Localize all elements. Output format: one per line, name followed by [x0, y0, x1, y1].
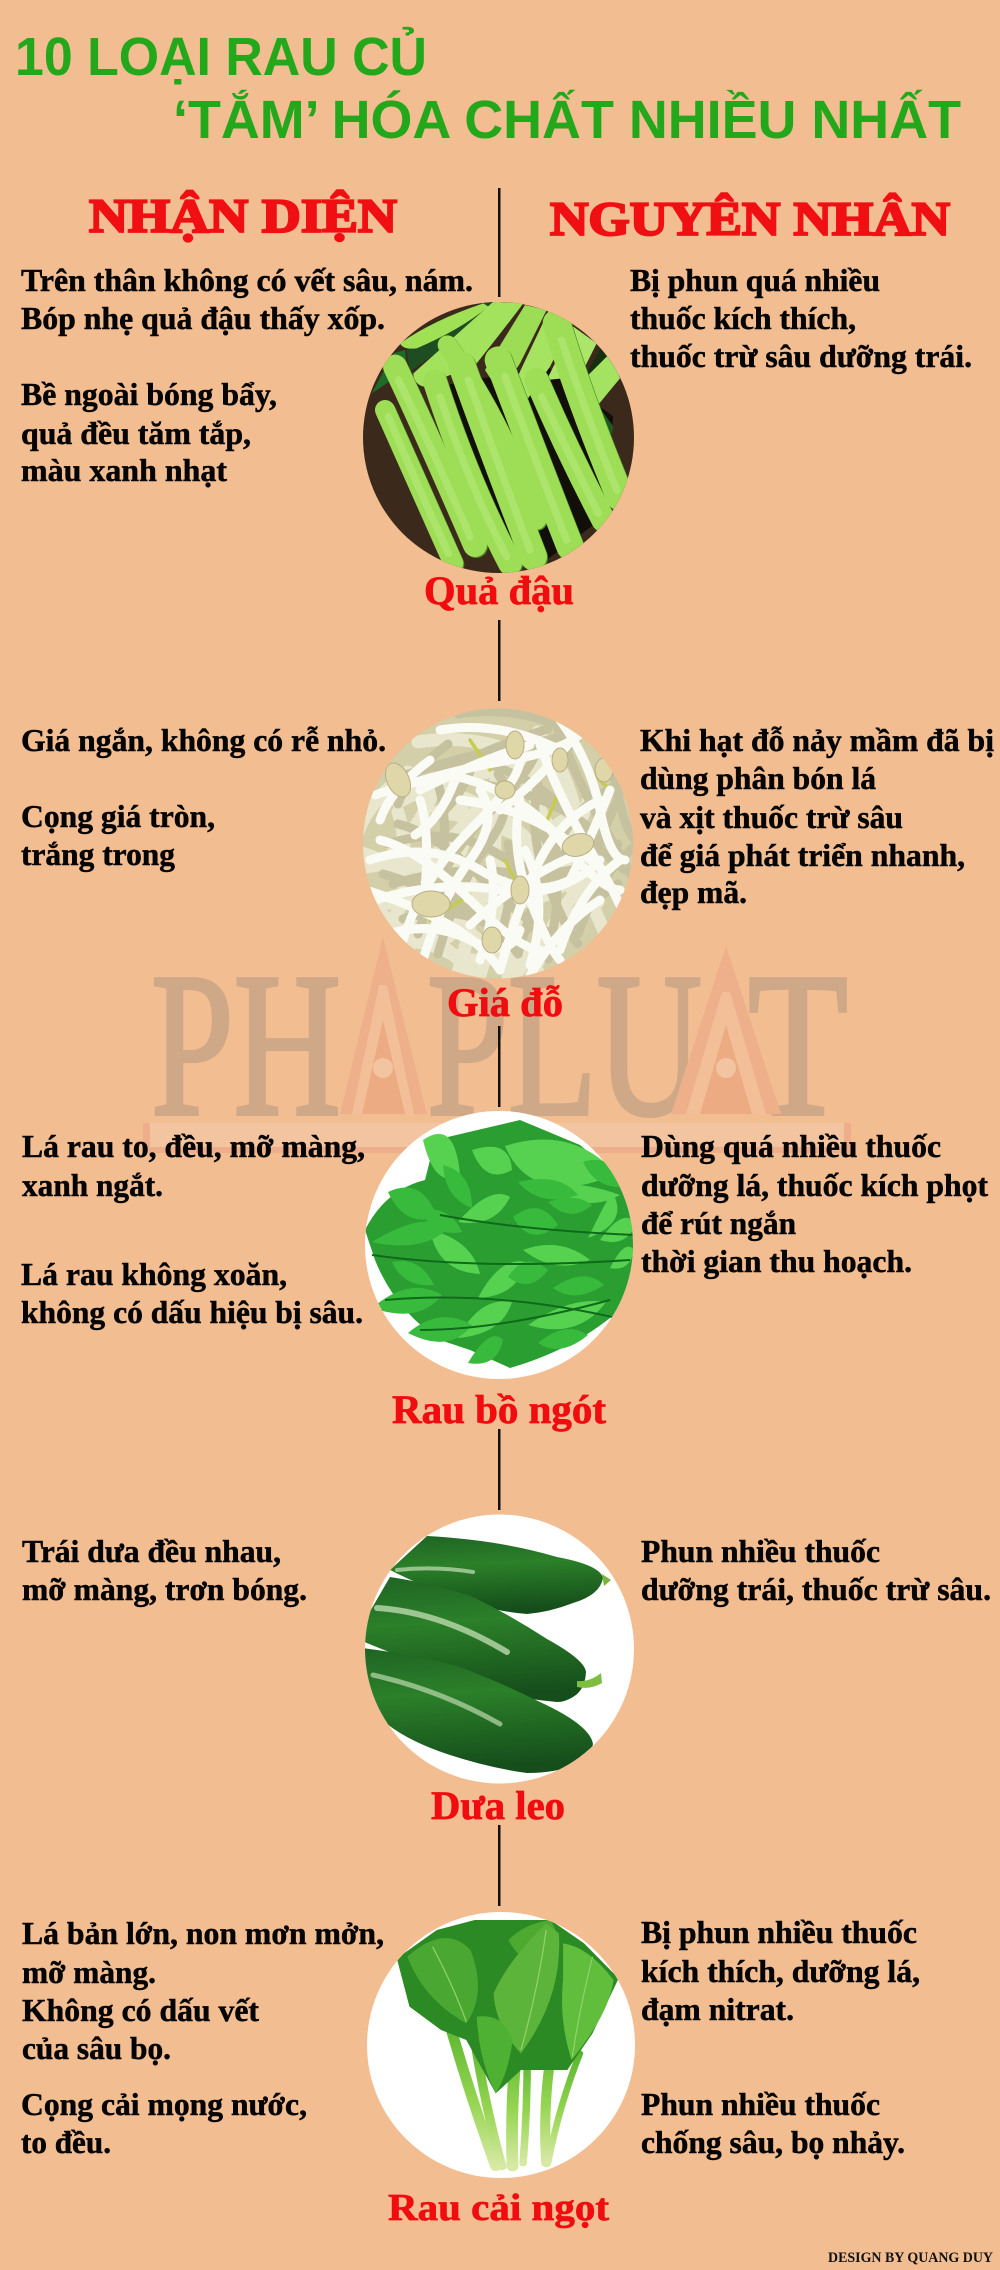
- identification text: Rau cải ngọt: [21, 1916, 384, 2160]
- cause text: Rau bồ ngót: Dùng quá nhiều thuốc: [641, 1129, 941, 1164]
- panel: Giá đỗ: [21, 704, 994, 1025]
- cause text: Giá đỗ: [640, 723, 994, 910]
- identification text: Dưa leo: mỡ màng, trơn bóng.: [22, 1572, 307, 1607]
- watermark: Pháp Luật logo: PLU: [427, 930, 702, 1159]
- identification text: Rau cải ngọt: Cọng cải mọng nước,: [21, 2087, 307, 2122]
- identification text: Quả đậu: màu xanh nhạt: [21, 453, 228, 488]
- cause text: Giá đỗ: và xịt thuốc trừ sâu: [640, 800, 903, 835]
- cause text: Dưa leo: [641, 1534, 991, 1607]
- panel: Dưa leo: [22, 1510, 991, 1828]
- cause text: Quả đậu: Bị phun quá nhiều: [630, 263, 880, 298]
- photo: choy sum greens: [360, 1905, 640, 2185]
- label: Quả đậu: Quả đậu: [424, 568, 574, 613]
- cause text: Rau cải ngọt: chống sâu, bọ nhảy.: [641, 2125, 905, 2160]
- cause text: Giá đỗ: dùng phân bón lá: [640, 761, 876, 796]
- vertical connector lines: [498, 188, 500, 1906]
- cause text: Giá đỗ: Khi hạt đỗ nảy mầm đã bị: [640, 723, 994, 758]
- identification text: Rau bồ ngót: Lá rau không xoăn,: [21, 1257, 287, 1292]
- identification text: Rau bồ ngót: Lá rau to, đều, mỡ màng,: [22, 1129, 365, 1164]
- cause text: Giá đỗ: đẹp mã.: [640, 875, 747, 910]
- cause text: Rau bồ ngót: dưỡng lá, thuốc kích phọt: [641, 1168, 989, 1203]
- identification text: Quả đậu: Trên thân không có vết sâu, nám.: [21, 263, 473, 298]
- identification text: Dưa leo: [22, 1534, 307, 1607]
- cause text: Rau cải ngọt: kích thích, dưỡng lá,: [641, 1954, 920, 1989]
- identification text: Rau cải ngọt: của sâu bọ.: [22, 2031, 171, 2066]
- cause text: Rau cải ngọt: đạm nitrat.: [641, 1992, 794, 2027]
- label: Dưa leo: Dưa leo: [431, 1783, 565, 1828]
- label: Rau bồ ngót: Rau bồ ngót: [392, 1387, 607, 1432]
- panel: Rau bồ ngót: [21, 1105, 989, 1432]
- cause text: Dưa leo: dưỡng trái, thuốc trừ sâu.: [641, 1572, 991, 1607]
- label: Giá đỗ: Giá đỗ: [447, 980, 563, 1025]
- identification text: Rau cải ngọt: mỡ màng.: [22, 1955, 156, 1990]
- identification text: Quả đậu: [21, 263, 473, 488]
- cause text: Quả đậu: thuốc kích thích,: [630, 301, 856, 336]
- cause text: Rau bồ ngót: thời gian thu hoạch.: [641, 1244, 912, 1279]
- cause text: Quả đậu: thuốc trừ sâu dưỡng trái.: [630, 339, 972, 374]
- cause text: Giá đỗ: để giá phát triển nhanh,: [640, 838, 965, 873]
- identification text: Quả đậu: quả đều tăm tắp,: [21, 416, 251, 451]
- identification text: Giá đỗ: Giá ngắn, không có rễ nhỏ.: [21, 723, 386, 758]
- cause text: Dưa leo: Phun nhiều thuốc: [641, 1534, 880, 1569]
- identification text: Giá đỗ: [21, 723, 386, 872]
- watermark: Pháp Luật logo: [143, 930, 851, 1159]
- cause text: Rau bồ ngót: [641, 1129, 989, 1279]
- identification text: Dưa leo: Trái dưa đều nhau,: [22, 1534, 281, 1569]
- identification text: Rau cải ngọt: Không có dấu vết: [22, 1993, 260, 2028]
- identification text: Rau cải ngọt: to đều.: [21, 2125, 111, 2160]
- panel: Rau cải ngọt: [21, 1905, 920, 2229]
- photo: bean sprouts: [363, 708, 633, 978]
- photo: cucumbers: [360, 1510, 640, 1790]
- title: 10 LOẠI RAU CỦ: [15, 27, 427, 87]
- heading: Nhận diện: NHẬN DIỆN: [89, 189, 397, 243]
- photo: green beans: [360, 300, 640, 580]
- identification text: Rau cải ngọt: Lá bản lớn, non mơn mởn,: [22, 1916, 384, 1951]
- identification text: Quả đậu: Bề ngoài bóng bẩy,: [21, 377, 277, 412]
- cause text: Quả đậu: [630, 263, 972, 374]
- identification text: Giá đỗ: trắng trong: [21, 837, 175, 872]
- watermark: Pháp Luật logo: PH: [151, 930, 341, 1159]
- watermark: Pháp Luật logo: T: [748, 930, 848, 1159]
- title: ‘TẮM’ HÓA CHẤT NHIỀU NHẤT: [173, 89, 961, 150]
- title: [15, 27, 961, 150]
- label: Rau cải ngọt: Rau cải ngọt: [388, 2187, 609, 2229]
- panel: Quả đậu: [21, 263, 972, 613]
- cause text: Rau cải ngọt: Phun nhiều thuốc: [641, 2087, 880, 2122]
- identification text: Quả đậu: Bóp nhẹ quả đậu thấy xốp.: [21, 301, 385, 336]
- cause text: Rau bồ ngót: để rút ngắn: [641, 1206, 796, 1241]
- identification text: Giá đỗ: Cọng giá tròn,: [21, 799, 215, 834]
- photo: katuk leaves: [360, 1105, 640, 1385]
- cause text: Rau cải ngọt: Bị phun nhiều thuốc: [641, 1915, 917, 1950]
- cause text: Rau cải ngọt: [641, 1915, 920, 2160]
- heading: Nguyên nhân: NGUYÊN NHÂN: [550, 192, 950, 246]
- identification text: Rau bồ ngót: không có dấu hiệu bị sâu.: [21, 1295, 363, 1330]
- identification text: Rau bồ ngót: [21, 1129, 365, 1330]
- identification text: Rau bồ ngót: xanh ngắt.: [22, 1168, 163, 1203]
